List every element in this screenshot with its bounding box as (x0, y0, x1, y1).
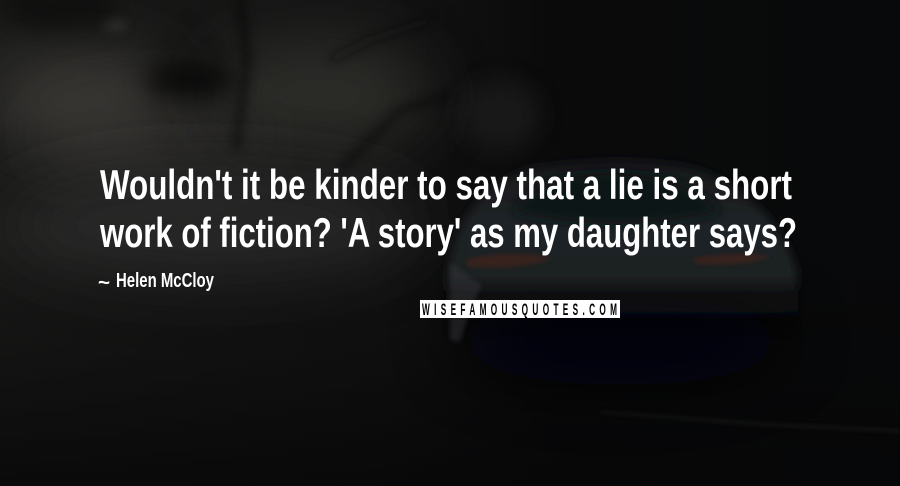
road lines (600, 412, 900, 431)
author name: Helen McCloy (116, 270, 215, 292)
tail light right (694, 254, 772, 265)
quote text (99, 161, 797, 256)
left shoulder highlight (450, 262, 482, 342)
watermark badge: WISEFAMOUSQUOTES.COM (422, 300, 617, 319)
author (98, 270, 215, 294)
tail light left (466, 254, 552, 267)
rear window (512, 172, 722, 224)
tilde: ~ (98, 272, 110, 294)
car silhouette (446, 160, 800, 385)
